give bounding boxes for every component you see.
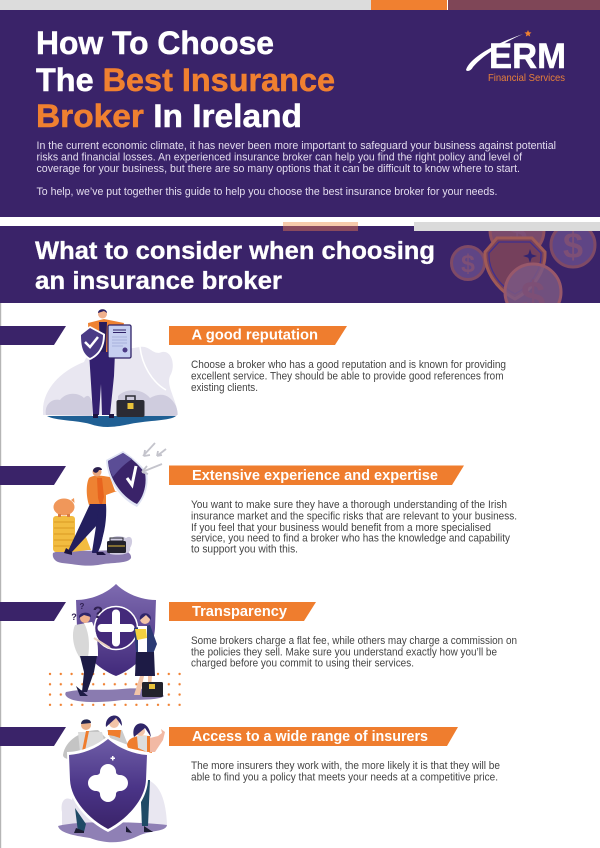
title: Broker In Ireland xyxy=(36,98,302,134)
title: The Best Insurance xyxy=(36,62,335,98)
intro text: To help, we’ve put together this guide to help you choose the best insurance broker for your needs. xyxy=(36,186,498,198)
top colour bar xyxy=(0,0,600,10)
description: charged before you commit to using their services. xyxy=(191,658,414,670)
heading bar: Access to a wide range of insurers xyxy=(192,728,428,745)
tab xyxy=(0,326,66,345)
icon: coins and shield: $ xyxy=(507,211,527,252)
tab xyxy=(0,727,66,746)
tab xyxy=(0,602,66,621)
intro text xyxy=(36,140,556,198)
illustration: three people behind shield xyxy=(58,716,167,842)
heading xyxy=(35,237,435,295)
intro text: In the current economic climate, it has never been more important to safeguard your business against potential xyxy=(36,140,556,152)
illustration: two people and shield with plus xyxy=(48,584,181,706)
description: existing clients. xyxy=(191,382,258,394)
description: You want to make sure they have a thorough understanding of the Irish xyxy=(191,499,507,511)
intro text: coverage for your business, but there are so many options that it can be difficult to know where to start. xyxy=(36,163,520,175)
heading bar xyxy=(169,326,347,345)
title xyxy=(36,25,335,134)
description: able to find you a policy that meets your needs at a competitive price. xyxy=(191,772,498,784)
description: the policies they sell. Make sure you understand exactly how you’ll be xyxy=(191,646,497,658)
description xyxy=(191,760,500,784)
description: The more insurers they work with, the more likely it is that they will be xyxy=(191,760,500,772)
logo: ERM Financial Services xyxy=(466,30,566,84)
description: excellent service. They should be able to provide good references from xyxy=(191,370,504,382)
tab xyxy=(0,466,66,485)
icon: coins and shield xyxy=(450,231,596,303)
panel: header xyxy=(0,10,600,217)
logo: ERM Financial Services: ERM xyxy=(489,37,566,76)
heading bar: Extensive experience and expertise xyxy=(192,467,438,484)
heading bar: A good reputation xyxy=(192,326,318,344)
description: service, you need to find a broker who has the knowledge and capability xyxy=(191,532,510,544)
description: Choose a broker who has a good reputation and is known for providing xyxy=(191,359,506,371)
accent bars xyxy=(283,222,600,231)
logo: ERM Financial Services: Financial Services xyxy=(488,72,565,84)
heading bar: Transparency xyxy=(192,603,288,620)
panel: extensive experience and expertise xyxy=(0,443,517,566)
illustration: man holding shield beside coins xyxy=(53,443,166,566)
illustration: man with shield and policy xyxy=(43,309,178,427)
description xyxy=(191,359,506,394)
description: If you feel that your business would benefit from a more specialised xyxy=(191,522,491,534)
panel: section banner xyxy=(0,226,600,303)
description: insurance market and the specific risks that are relevant to your business. xyxy=(191,510,517,522)
heading bar xyxy=(169,602,316,621)
description xyxy=(191,499,517,556)
illustration: two people and shield with plus: ? xyxy=(93,603,103,622)
description: to support you with this. xyxy=(191,544,298,556)
panel: a good reputation xyxy=(0,309,506,427)
panel: access to a wide range of insurers xyxy=(0,716,500,842)
icon: coins and shield: $ xyxy=(461,250,475,278)
icon: coins and shield: $ xyxy=(521,273,545,322)
description xyxy=(191,635,517,670)
illustration: two people and shield with plus: ? xyxy=(71,612,77,622)
description: Some brokers charge a flat fee, while others may charge a commission on xyxy=(191,635,517,647)
intro text: risks and financial losses. An experienced insurance broker can help you find the right policy and level of xyxy=(36,152,523,164)
heading: an insurance broker xyxy=(35,267,282,295)
heading: What to consider when choosing xyxy=(35,237,435,265)
illustration: two people and shield with plus: ? xyxy=(80,602,85,611)
title: How To Choose xyxy=(36,25,274,61)
panel: transparency xyxy=(0,584,517,706)
icon: coins and shield: $ xyxy=(563,225,583,266)
